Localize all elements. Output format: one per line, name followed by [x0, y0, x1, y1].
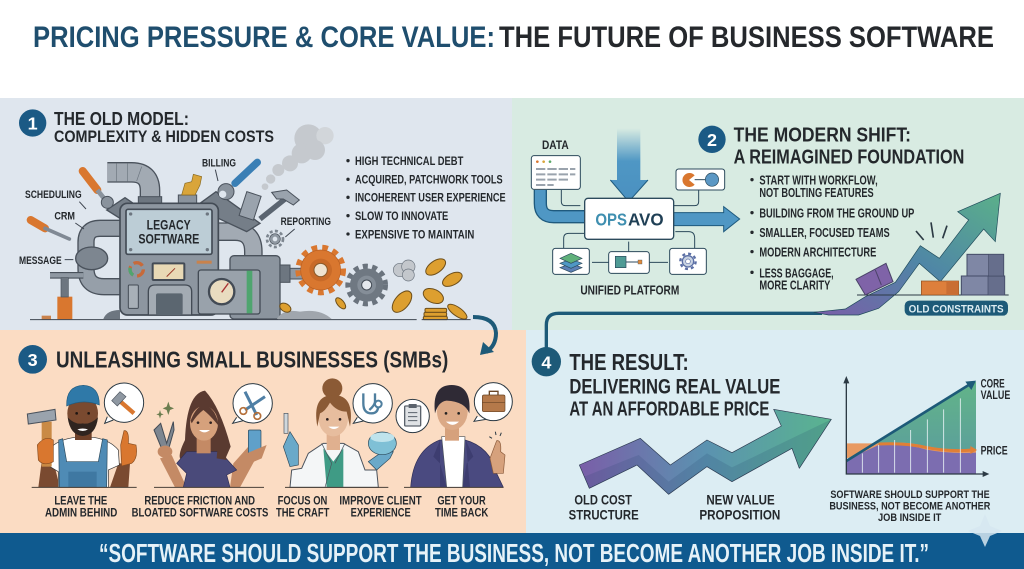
bullet list: modern shift: BUILDING FROM THE GROUND UP — [759, 206, 915, 220]
heading: the result: 4 — [541, 352, 551, 372]
icon: sparkle — [968, 514, 1002, 547]
chart caption: SOFTWARE SHOULD SUPPORT THE — [830, 489, 990, 501]
panel: the result — [526, 330, 1024, 533]
right housing — [230, 256, 280, 319]
captions: smb benefits: FOCUS ON — [278, 493, 327, 507]
bullet list: old model problems: HIGH TECHNICAL DEBT — [355, 154, 464, 168]
label: unified platform: UNIFIED PLATFORM — [580, 283, 679, 297]
captions: smb benefits: IMPROVE CLIENT — [339, 493, 422, 507]
nameplate: legacy software — [126, 209, 212, 254]
bullet list: modern shift: SMALLER, FOCUSED TEAMS — [759, 226, 890, 240]
person: clinician — [283, 378, 396, 487]
heading: the old model: COMPLEXITY & HIDDEN COSTS — [54, 127, 274, 146]
captions: smb benefits: BLOATED SOFTWARE COSTS — [132, 506, 268, 520]
captions: smb benefits: THE CRAFT — [276, 506, 330, 520]
labels: machine modules: SCHEDULING — [25, 189, 82, 201]
nameplate: legacy software: LEGACY — [147, 217, 191, 233]
label: data: DATA — [542, 138, 569, 152]
title — [33, 21, 994, 54]
icon: orange wrench — [83, 171, 113, 208]
captions: smb benefits: ADMIN BEHIND — [45, 506, 118, 520]
chart labels: VALUE — [981, 388, 1010, 402]
icon: screwdriver — [31, 220, 69, 239]
nameplate: legacy software: SOFTWARE — [138, 231, 199, 247]
icon: connector window — [676, 169, 725, 190]
captions: smb benefits: TIME BACK — [435, 506, 489, 520]
arrow: value zigzag — [579, 409, 831, 494]
captions: smb benefits: EXPERIENCE — [351, 506, 411, 520]
bullet list: modern shift: MODERN ARCHITECTURE — [759, 246, 876, 260]
panel: unleashing small businesses — [0, 330, 526, 533]
icon: small gear — [267, 231, 283, 247]
impact marks — [916, 222, 947, 240]
chart caption: JOB INSIDE IT — [878, 512, 942, 524]
bullet list: modern shift — [750, 174, 915, 292]
logo box: opsavo: AVO — [628, 209, 664, 229]
labels: machine modules: CRM — [54, 211, 75, 223]
chart labels: CORE — [981, 376, 1005, 390]
icon: hammer — [260, 190, 299, 219]
heading: the modern shift: A REIMAGINED FOUNDATION — [734, 145, 964, 168]
bubble: clipboard — [396, 399, 429, 433]
bullet list: old model problems: INCOHERENT USER EXPERIENCE — [355, 191, 506, 205]
bullet list: modern shift: START WITH WORKFLOW, — [759, 174, 878, 188]
heading: the result: AT AN AFFORDABLE PRICE — [569, 397, 769, 420]
icon: blue wrench — [218, 162, 257, 200]
bullet list: old model problems: SLOW TO INNOVATE — [355, 209, 448, 223]
person: stylist — [154, 391, 267, 487]
connector stub — [541, 330, 551, 350]
ground line — [30, 318, 471, 321]
labels: machine modules: MESSAGE — [19, 255, 62, 267]
heading: the result: DELIVERING REAL VALUE — [569, 373, 780, 398]
arrow: old model to small businesses — [473, 317, 496, 355]
arrow: rising growth — [814, 193, 1000, 315]
captions: smb benefits: LEAVE THE — [54, 493, 107, 507]
bubble: stethoscope — [353, 384, 392, 423]
logo box: opsavo — [585, 198, 674, 239]
heading: unleashing smbs: UNLEASHING SMALL BUSINESSES (SMBs) — [56, 347, 448, 373]
illustration: legacy software machine — [42, 163, 332, 320]
heading: the old model: THE OLD MODEL: — [54, 108, 189, 129]
heading: the modern shift: 2 — [707, 130, 717, 150]
labels: zigzag: NEW VALUE — [706, 492, 775, 508]
logo box: opsavo: OPS — [595, 209, 627, 229]
bullet list: modern shift: MORE CLARITY — [759, 278, 831, 292]
icon: falling coins — [278, 256, 469, 322]
bullet list: old model problems: ACQUIRED, PATCHWORK TOOLS — [355, 173, 503, 187]
panel: the modern shift — [512, 98, 1024, 337]
bullet list: old model problems: EXPENSIVE TO MAINTAIN — [355, 227, 474, 241]
panel: the old model — [0, 98, 512, 330]
icon: gold part — [182, 174, 202, 195]
bullet list: old model problems — [346, 154, 506, 241]
heading: the result: THE RESULT: — [569, 349, 689, 375]
machine body — [120, 203, 218, 315]
pipes — [50, 163, 253, 287]
bullet list: modern shift: LESS BAGGAGE, — [759, 266, 834, 280]
person: business owner — [411, 385, 505, 487]
bubble: hammer — [104, 383, 144, 423]
labels: machine modules: REPORTING — [281, 216, 331, 228]
heading: the result — [532, 347, 780, 420]
icon: data window — [531, 156, 580, 189]
icon: smoke — [262, 124, 334, 190]
icon: settings gear — [670, 248, 706, 274]
labels: zigzag: PROPOSITION — [699, 506, 780, 522]
heading: the modern shift — [698, 124, 964, 168]
labels: zigzag — [569, 492, 780, 522]
bullet list: modern shift: NOT BOLTING FEATURES — [759, 186, 874, 200]
heading: the modern shift: THE MODERN SHIFT: — [734, 124, 911, 147]
chart caption — [829, 489, 990, 524]
chart: core value vs price — [843, 376, 1010, 477]
diagram: unified platform — [531, 128, 740, 297]
ground lines — [32, 486, 503, 489]
heading: the old model: 1 — [28, 113, 38, 133]
chart labels — [981, 376, 1010, 457]
title: PRICING PRESSURE & CORE VALUE: — [33, 21, 495, 54]
badge: old constraints: OLD CONSTRAINTS — [909, 303, 1004, 315]
pipes — [540, 128, 740, 262]
icon: layers — [553, 248, 589, 274]
icon: small smoke puff — [393, 260, 415, 281]
icon: gray gear — [348, 266, 385, 304]
heading: unleashing smbs: 3 — [28, 350, 38, 370]
bubble: briefcase — [474, 383, 512, 421]
labels: zigzag: OLD COST — [574, 492, 632, 508]
captions: smb benefits: GET YOUR — [437, 493, 486, 507]
connector: to result — [546, 313, 822, 337]
heading: the old model — [19, 108, 274, 146]
captions: smb benefits: REDUCE FRICTION AND — [144, 493, 255, 507]
chart caption: BUSINESS, NOT BECOME ANOTHER — [829, 501, 990, 513]
labels: zigzag: STRUCTURE — [569, 506, 639, 522]
icon: ruler — [239, 192, 261, 220]
icon: orange gear — [298, 248, 343, 292]
labels: machine modules: BILLING — [202, 157, 236, 169]
bubble: scissors — [233, 384, 272, 423]
captions: smb benefits — [45, 493, 489, 520]
chart labels: PRICE — [981, 443, 1008, 457]
labels: machine modules — [19, 157, 331, 267]
machine shoulders — [200, 192, 260, 232]
icon: old constraint boxes — [856, 254, 1009, 295]
icon: flow node — [609, 252, 649, 273]
person: tradesman — [27, 385, 137, 487]
